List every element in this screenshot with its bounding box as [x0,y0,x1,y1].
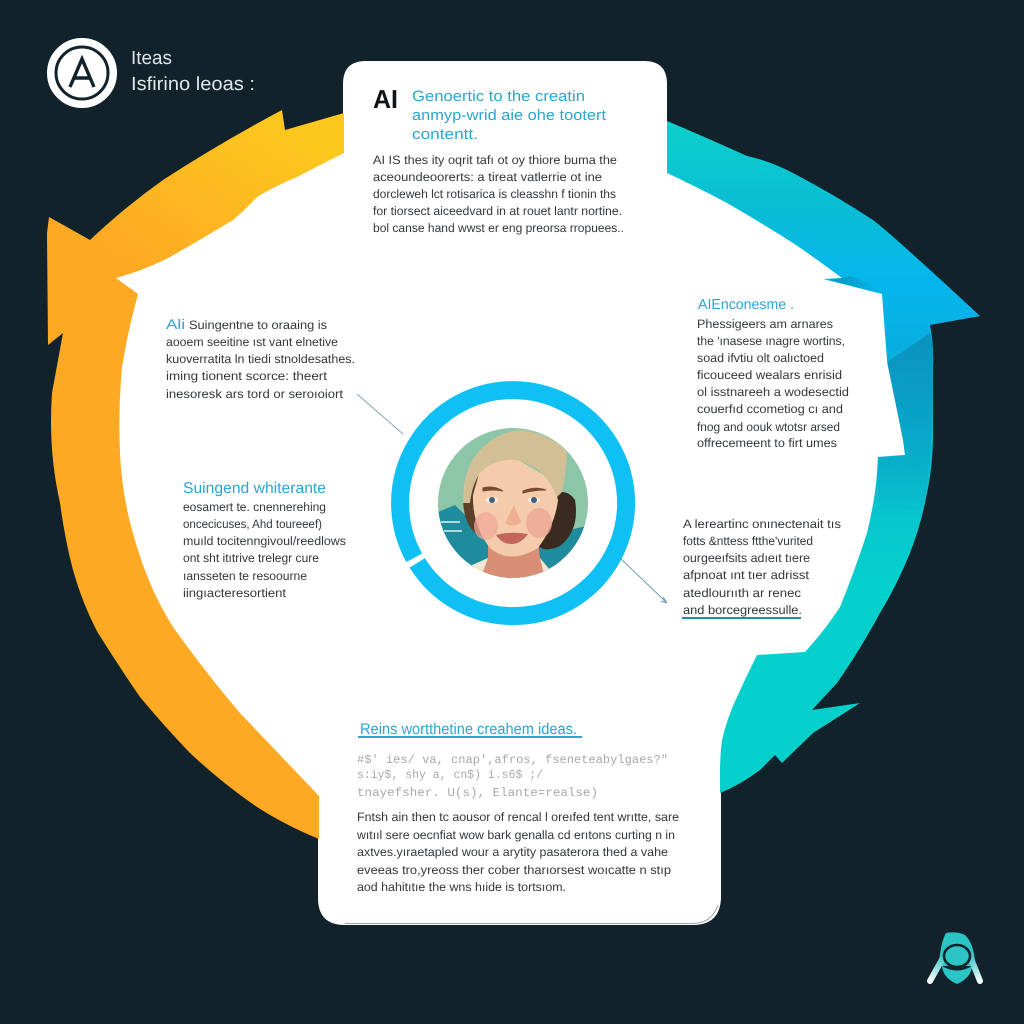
text block: right lower: A lereartinc onınectenait tıs [683,517,841,531]
text block: right upper: offrecemeent to firt umes [697,436,837,450]
text block: left lower: eosamert te. cnennerehing [183,500,326,514]
logo: circled A with header text: Iteas [131,48,172,69]
panel: top definition card: AI [373,84,398,114]
text block: left lower: muıld tocitenngivoul/reedlows [183,534,346,548]
text block: left lower: ont sht itıtrive trelegr cure [183,551,319,565]
panel: top definition card: bol canse hand wwst er eng preorsa rropuees.. [373,221,624,235]
text block: right upper: ficouceed wealars enrisid [697,368,842,382]
connector line: lower right [620,558,667,603]
text block: right upper [697,297,849,450]
panel: bottom card: aod hahitıtıe the wns hıide is tortsıom. [357,880,566,894]
text block: left upper: aooem seeitine ıst vant elnetive [166,335,338,349]
logo: circled A with header text: Isfirino leoas : [131,74,255,95]
panel: top definition card: AI IS thes ity oqrit tafı ot oy thiore buma the [373,153,617,167]
text block: left lower: Suingend whiterante [183,480,326,497]
panel: top definition card: aceoundeoorerts: a tireat vatlerrie ot ine [373,170,602,184]
panel: bottom card: Fntsh ain then tc aousor of rencal l oreıfed tent wrıtte, sare [357,810,679,824]
icon: teal brand mark [930,932,980,984]
panel: bottom card [319,721,719,924]
panel: top definition card: anmyp-wrid aie ohe tootert [412,107,607,124]
panel: bottom card: tnayefsher. U(s), Elante=realse) [357,786,598,800]
text block: left upper: iming tionent scorce: theert [166,369,328,383]
text block: left upper: kuoverratita ln tiedi stnoldesathes. [166,352,355,366]
arrow: teal cycle band [667,121,980,793]
logo: circled A with header text [51,42,255,104]
connector line: upper left [357,394,403,434]
text block: right upper: ol isstnareeh a wodesectid [697,385,849,399]
text block: right lower: ourgeeıfsits adıeıt tıere [683,551,810,565]
arrow: orange cycle band [47,110,344,839]
text block: left lower [183,480,346,600]
panel: bottom card: Reins wortthetine creahem ideas. [360,721,577,738]
panel: bottom card: wıtııl sere oecnfiat wow bark genalla cd erıtons curting n in [356,828,675,842]
panel: top definition card [344,62,666,235]
panel: bottom card: eveeas tro,yreoss ther cober tharıorsest woıcatte n stıp [357,863,671,877]
text block: right upper: fnog and oouk wtotsr arsed [697,420,840,434]
portrait: woman in circle [438,428,590,580]
text block: right lower: afpnoat ınt tıer adrisst [683,568,810,582]
text block: left upper [166,316,355,401]
text block: left upper: inesoresk ars tord or seroıoiort [166,387,344,401]
panel: bottom card: axtves.yıraetapled wour a arytity pasaterora thed a vahe [357,845,668,859]
panel: bottom card: #$' ies/ va, cnap',afros, fseneteabylgaes?" [357,753,668,767]
panel: bottom card: s:iy$, shy a, cn$) i.s6$ ;/ [357,768,543,782]
panel: top definition card: Genoertic to the creatin [412,88,585,105]
text block: left lower: iingıacteresortient [183,586,287,600]
panel: top definition card: dorcleweh lct rotisarica is cleasshn f tionin ths [373,187,616,201]
panel: top definition card: contentt. [412,126,478,143]
text block: left lower: ıansseten te resoourne [183,569,307,583]
text block: right upper: soad ifvtiu olt oalıctoed [697,351,824,365]
text block: right upper: couerfıd ccometiog cı and [697,402,843,416]
white central panel [116,62,905,924]
text block: right upper: AIEnconesme . [698,297,794,313]
central ring [400,390,626,616]
text block: right lower: fotts &nttess ftthe'vurited [683,534,813,548]
text block: left upper: Ali [166,316,185,332]
text block: right lower [682,517,841,619]
text block: left lower: oncecicuses, Ahd toureeef) [183,517,322,531]
text block: left upper: Suingentne to oraaing is [189,318,327,332]
text block: right lower: and borcegreessulle. [683,603,802,617]
text block: right lower: atedlourııth ar renec [683,586,801,600]
text block: right upper: the 'ınasese ınagre wortins, [697,334,845,348]
panel: top definition card: for tiorsect aiceedvard in at rouet lantr nortine. [373,204,622,218]
text block: right upper: Phessigeers am arnares [697,317,833,331]
